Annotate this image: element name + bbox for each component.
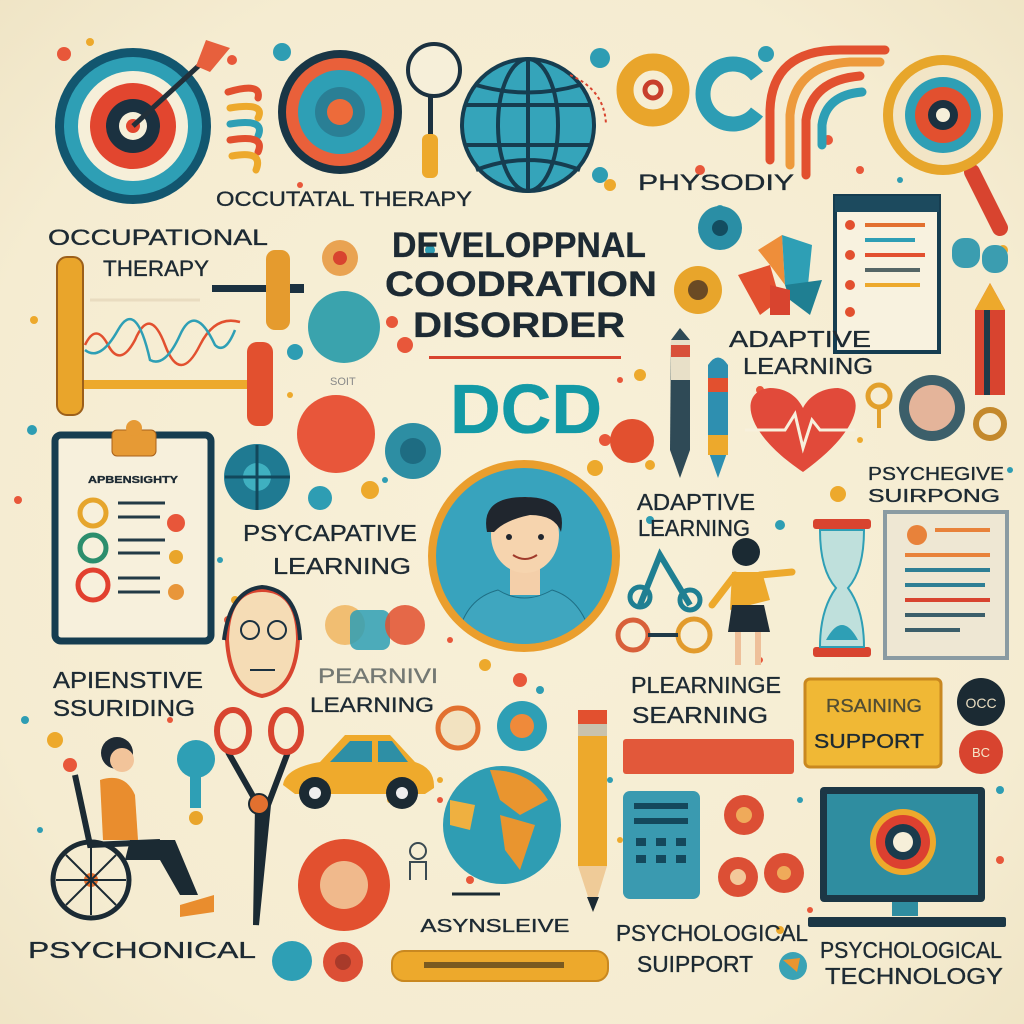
- label: psychological support: [616, 920, 808, 977]
- icon: pencil: [578, 710, 607, 912]
- label: apienstive ssuriding: SSURIDING: [53, 695, 195, 721]
- label: psychological technology: [820, 937, 1003, 989]
- title: [385, 226, 657, 359]
- icon: checklist document: [835, 196, 939, 352]
- icon: dark badge: [957, 678, 1005, 726]
- icon: segmented dial: [224, 444, 290, 510]
- label: adaptive learning middle: LEARNING: [638, 515, 750, 541]
- icon: heart with pulse: [745, 388, 856, 472]
- label: psychological technology: TECHNOLOGY: [825, 963, 1003, 989]
- icon: globe wireframe: [462, 59, 606, 191]
- icon: small dart: [452, 892, 500, 896]
- panel: training support: SUPPORT: [814, 731, 924, 753]
- icon: ruler: [623, 739, 794, 774]
- label: psycapative learning: LEARNING: [273, 553, 411, 579]
- label: psycapative learning: PSYCAPATIVE: [243, 520, 417, 546]
- label: apienstive ssuriding: [53, 667, 203, 721]
- icon: teal links: [952, 238, 1008, 273]
- progress bar: [392, 951, 608, 981]
- title: DEVELOPPNAL: [392, 226, 646, 265]
- icon: round dial: [278, 50, 402, 174]
- label: psycapative learning: [243, 520, 417, 579]
- icon: target with arrow: [55, 40, 230, 204]
- icon: teal wrench tool: [177, 740, 215, 825]
- panel: training support: RSAINING: [826, 696, 922, 716]
- panel: training support: [805, 679, 941, 767]
- label: adaptive learning middle: [637, 489, 755, 541]
- label: psychegive surpong: PSYCHEGIVE: [868, 464, 1004, 484]
- icon: OC letters shapes: [625, 62, 757, 124]
- icon: red rings: [718, 795, 804, 897]
- icon: balls bottom: [272, 941, 363, 982]
- label: psychonical: PSYCHONICAL: [28, 937, 256, 963]
- icon: colorful puzzle cross: [738, 235, 822, 315]
- icon: hourglass: [813, 519, 871, 657]
- icon: striped pencil: [975, 283, 1005, 438]
- icon: calculator: [623, 791, 700, 899]
- icon: clipboard with checklist: APBENSIGHTY: [88, 475, 178, 486]
- icon: ring buttons: [438, 701, 547, 751]
- label: occupational therapy: [48, 225, 268, 281]
- icon: pens: [670, 328, 728, 478]
- icon: red badge: BC: [972, 745, 990, 760]
- icon: large red disc: [298, 839, 390, 931]
- icon: child in wheelchair: [53, 737, 214, 918]
- icon: tiny figure: [410, 843, 426, 880]
- icon: rainbow arch: [770, 50, 885, 175]
- icon: standing child: [712, 538, 792, 665]
- label: pearnint learning: LEARNING: [310, 694, 434, 717]
- icon: yellow badge: [674, 266, 722, 314]
- label: adaptive learning top: ADAPTIVE: [729, 326, 871, 352]
- icon: magnifying glass: [408, 44, 460, 178]
- icon: head outline: [224, 587, 300, 696]
- label: pleaning searning: SEARNING: [632, 702, 768, 728]
- title: DISORDER: [413, 306, 625, 345]
- label: occupational therapy: THERAPY: [103, 256, 209, 281]
- label: psychegive surpong: SUIRPONG: [868, 486, 1000, 506]
- label: asynsleive: ASYNSLEIVE: [420, 915, 570, 936]
- icon: world globe: [443, 766, 561, 884]
- label: psychological technology: PSYCHOLOGICAL: [820, 937, 1002, 963]
- icon: colored blobs: [325, 605, 425, 650]
- icon: open report document: [885, 512, 1007, 658]
- label: physodiy: PHYSODIY: [638, 170, 794, 195]
- icon: linked tools: [618, 555, 710, 651]
- icon: computer monitor: [808, 787, 1006, 927]
- icon: teal ring: [698, 206, 742, 250]
- label: pearnint learning: PEARNIVI: [318, 665, 438, 688]
- icon: dark badge: OCC: [965, 695, 997, 711]
- label: apienstive ssuriding: APIENSTIVE: [53, 667, 203, 693]
- icon: location pin: [868, 385, 890, 428]
- label: pearnint learning: [310, 665, 438, 717]
- small faded text: SOIT: [330, 376, 356, 388]
- label: occupational therapy: OCCUPATIONAL: [48, 225, 268, 250]
- label: pleaning searning: PLEARNINGE: [631, 672, 781, 698]
- icon: large magnifier target: [883, 55, 1003, 228]
- icon: red button: [610, 419, 654, 463]
- label: pleaning searning: [631, 672, 781, 728]
- icon: small phone: [322, 240, 358, 276]
- icon: teal button ball: [385, 423, 441, 479]
- icon: coil spring: [228, 88, 259, 170]
- title: COODRATION: [385, 265, 657, 304]
- label: psychological support: SUIPPORT: [637, 951, 753, 977]
- label: adaptive learning top: [729, 326, 873, 379]
- icon: clipboard with checklist: [55, 420, 211, 641]
- label: adaptive learning middle: ADAPTIVE: [637, 489, 755, 515]
- icon: barbell with wave chart: [57, 250, 304, 426]
- icon: teal ball: [308, 291, 380, 363]
- icon: portrait badge: [899, 375, 965, 441]
- label: psychegive surpong: [868, 464, 1004, 506]
- icon: scissors: [217, 710, 301, 925]
- icon: mini globe: [779, 952, 807, 980]
- label: occutatal therapy: OCCUTATAL THERAPY: [216, 187, 472, 211]
- label: psychological support: PSYCHOLOGICAL: [616, 920, 808, 946]
- icon: yellow car: [283, 735, 434, 809]
- icon: red ball: [297, 395, 375, 473]
- icon: red badge: [959, 730, 1003, 774]
- DCD heading: DCD: [450, 370, 602, 448]
- label: adaptive learning top: LEARNING: [743, 353, 873, 379]
- icon: portrait medallion: [432, 464, 616, 650]
